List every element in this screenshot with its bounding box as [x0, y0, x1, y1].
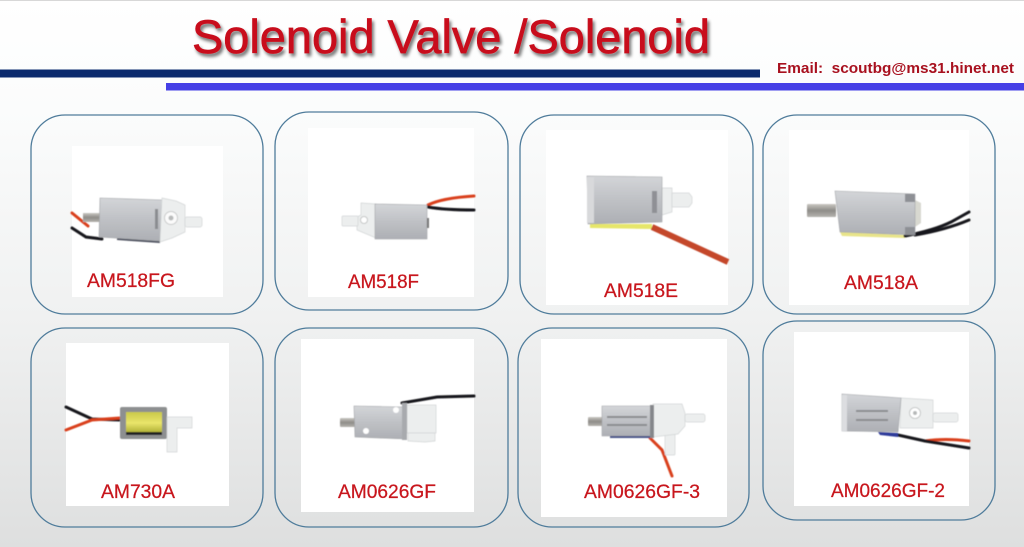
label: AM518F [348, 272, 419, 293]
panel: AM518FG [31, 115, 263, 314]
email contact: Email: scoutbg@ms31.hinet.net [777, 61, 1014, 77]
icon: valve AM518A [807, 191, 969, 238]
icon: valve AM518E [587, 176, 728, 262]
panel: AM0626GF-3 [518, 328, 749, 527]
icon: valve AM730A [66, 407, 192, 452]
label: AM730A [101, 482, 175, 503]
panel: AM730A [31, 328, 263, 527]
icon: valve AM518F [342, 196, 474, 239]
label: AM0626GF-2 [831, 481, 945, 502]
icon: valve AM0626GF [340, 396, 474, 442]
label: AM518E [604, 281, 678, 302]
label: AM518FG [87, 271, 175, 292]
title: Solenoid Valve /Solenoid [192, 10, 710, 63]
label: AM0626GF [338, 482, 436, 503]
icon: valve AM518FG [72, 198, 202, 243]
label: AM0626GF-3 [584, 482, 700, 503]
panel: AM518A [763, 115, 995, 314]
icon: valve AM0626GF-2 [842, 394, 969, 448]
header bar: blue [166, 83, 1024, 90]
header bar: navy [0, 70, 760, 78]
icon: valve AM0626GF-3 [588, 404, 705, 476]
panel: AM0626GF [275, 328, 508, 527]
label: AM518A [844, 273, 918, 294]
panel: AM518E [520, 115, 753, 314]
panel: AM518F [275, 112, 508, 310]
panel: AM0626GF-2 [763, 321, 995, 520]
